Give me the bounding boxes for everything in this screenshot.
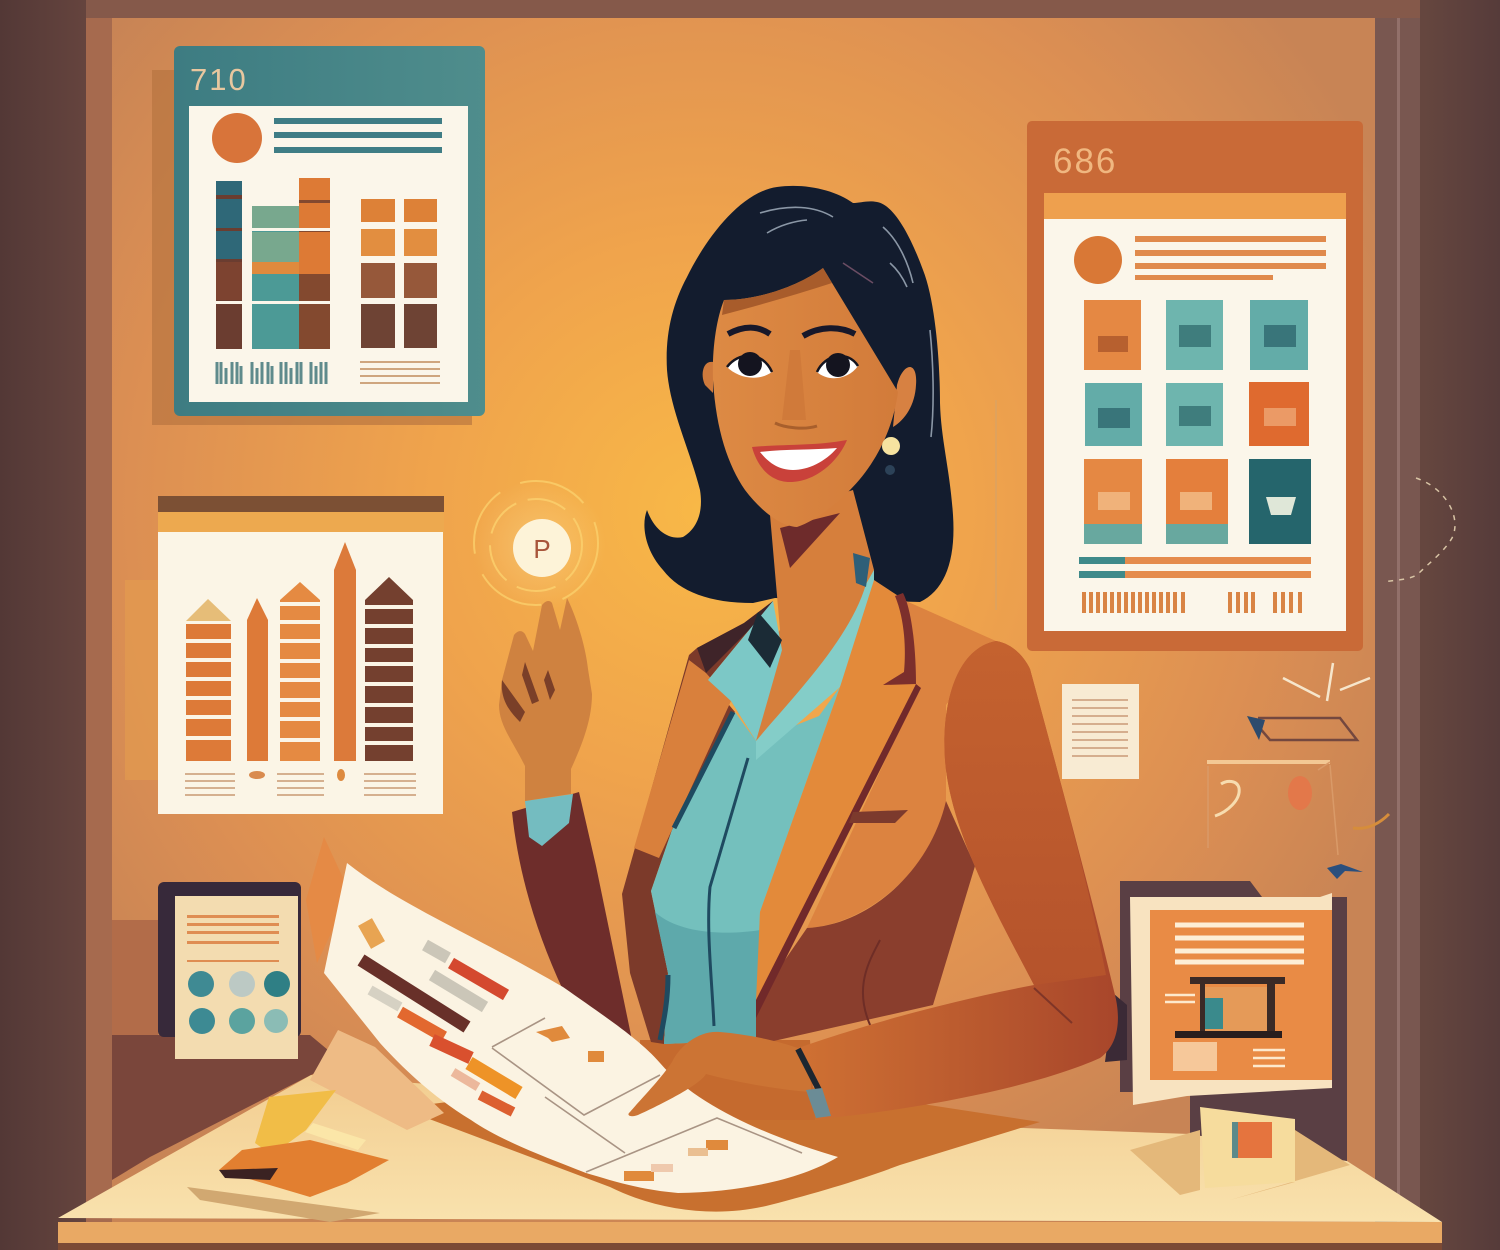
- torso filler: [640, 1040, 815, 1120]
- progress bars: [1079, 557, 1311, 578]
- collar navy strip: [853, 553, 870, 587]
- nose: [775, 423, 817, 428]
- blouse left edge: [660, 712, 733, 1040]
- header lines: [1135, 236, 1326, 280]
- icon: glowing badge: [474, 479, 606, 611]
- desk shadow under document and arm: [400, 1070, 1040, 1212]
- lower hand: [628, 1032, 811, 1116]
- elbow back: [1105, 994, 1127, 1062]
- barcode and caption lines: [217, 362, 440, 384]
- finger shading: [502, 662, 555, 722]
- jacket lower: [756, 801, 975, 1045]
- right arm: [798, 641, 1118, 1119]
- cuff: [525, 794, 573, 846]
- tablet leaflet: [158, 882, 301, 1059]
- collar left shade: [748, 612, 782, 668]
- nose shade: [782, 350, 806, 420]
- eyes: [727, 352, 858, 378]
- note card: [1062, 684, 1139, 779]
- icons: [188, 971, 290, 1034]
- lapel: [756, 580, 916, 1001]
- arm crease: [1034, 988, 1072, 1023]
- forehead shade: [722, 268, 832, 315]
- lines: [187, 915, 279, 962]
- main spread document: [324, 863, 838, 1193]
- orange folder behind document: [306, 837, 350, 963]
- desk brochure: [187, 1090, 389, 1222]
- woman: [499, 186, 996, 1120]
- icon: header circle: [1074, 236, 1122, 284]
- panel: top-left bar chart report: [152, 46, 485, 425]
- document mini icons: [536, 1026, 728, 1181]
- report number: 686: [1053, 142, 1117, 181]
- face: [713, 268, 898, 527]
- hair highlights: [760, 207, 933, 437]
- brown cabinet below tablet: [112, 1035, 340, 1180]
- watch: [798, 1049, 831, 1118]
- blouse lower shade: [655, 912, 760, 1044]
- document bars: [361, 922, 519, 1112]
- panel: right desk display: [1120, 881, 1347, 1161]
- ear left: [703, 362, 713, 393]
- hair back: [644, 186, 953, 603]
- small photo card: [1130, 1107, 1350, 1200]
- neck: [731, 490, 874, 741]
- jacket shoulder edge: [697, 601, 773, 673]
- arrow bar chart: [186, 542, 413, 761]
- raised hand: [499, 598, 592, 801]
- ear right: [893, 367, 916, 427]
- lapel dark line: [756, 684, 921, 1018]
- icon: orange circle: [212, 113, 262, 163]
- icon: glowing badge: P: [533, 534, 551, 564]
- eyebrows: [728, 328, 855, 336]
- jacket chest: [807, 601, 996, 928]
- caption lines: [185, 769, 416, 795]
- panel: right grid report: [1027, 121, 1363, 651]
- muted wall block left of tablet: [112, 920, 158, 1035]
- brochure shadow: [187, 1187, 380, 1222]
- jacket seam: [863, 940, 880, 1035]
- grid chart: [361, 199, 437, 348]
- barcode strip: [1084, 592, 1300, 613]
- collar left: [708, 601, 782, 741]
- document panels: [492, 1018, 802, 1172]
- small building icon: [1175, 977, 1285, 1038]
- jacket pocket: [849, 810, 908, 823]
- header lines: [274, 118, 442, 153]
- earring: [882, 437, 900, 475]
- scattered sketch doodles: [1207, 478, 1455, 879]
- jacket left lapel: [634, 660, 731, 858]
- stacked bar chart: [216, 178, 330, 349]
- neck shadow: [780, 513, 840, 568]
- panel: left arrow bars report: [125, 496, 444, 814]
- desk: [58, 1075, 1442, 1250]
- collar dark: [883, 593, 916, 685]
- mouth: [752, 440, 847, 482]
- jacket left: [622, 601, 773, 1044]
- beige folded paper: [310, 1030, 444, 1130]
- left sleeve: [512, 792, 632, 1045]
- report number: 710: [190, 62, 248, 97]
- blouse: [651, 687, 840, 1044]
- collar right: [756, 570, 874, 760]
- upper arm: [944, 641, 1106, 985]
- tile grid: [1084, 300, 1311, 544]
- blouse placket: [709, 758, 748, 1026]
